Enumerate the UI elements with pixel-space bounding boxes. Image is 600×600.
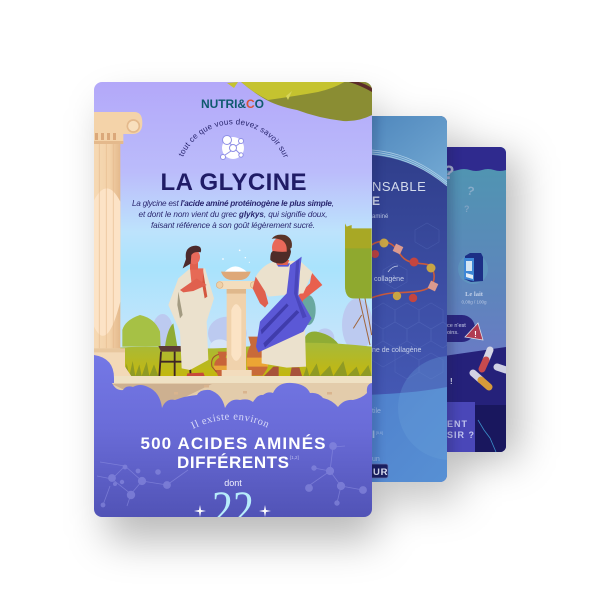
chain label: collagène	[374, 276, 404, 283]
intro paragraph: et dont le nom vient du grec glykys, qui signifie doux,	[138, 210, 328, 219]
scene: background, figures and props	[93, 112, 373, 377]
tree canopy top right	[227, 81, 372, 121]
intro arc text: Il existe environ	[190, 414, 268, 429]
intro paragraph	[132, 199, 334, 230]
icon: milk carton	[458, 253, 488, 284]
back card: milk page	[447, 147, 506, 452]
main title: LA GLYCINE	[160, 169, 306, 196]
headline 500 acides aminés: DIFFÉRENTS	[177, 453, 289, 472]
heading fragment: E	[372, 194, 380, 208]
dark curtain	[475, 405, 506, 452]
question marks: ?	[464, 204, 470, 214]
intro paragraph: La glycine est l'acide aminé protéinogène le plus simple,	[132, 199, 334, 208]
milk label: 0,08g / 100g	[461, 300, 487, 304]
question marks: ?	[466, 183, 476, 199]
man figure	[253, 235, 322, 377]
lower blue panel	[372, 387, 447, 482]
soft drop shadows	[106, 105, 518, 541]
stool	[158, 346, 192, 376]
jar right	[247, 337, 268, 376]
bushes	[122, 295, 340, 347]
headline 500 acides aminés: 500 ACIDES AMINÉS	[140, 434, 326, 453]
exclamation text: !	[450, 377, 453, 386]
collagen chain diagram	[365, 238, 438, 302]
question heading: SIR ?	[447, 430, 475, 440]
question marks: ?	[443, 163, 455, 184]
sparkles	[194, 505, 271, 517]
panel text fragments: [5,6]	[376, 431, 383, 435]
heading fragment	[372, 182, 426, 218]
left ionic column	[93, 112, 142, 377]
milk label: Le lait	[465, 291, 484, 298]
light blue header	[372, 116, 447, 186]
logo: NUTRI&CO	[201, 97, 264, 111]
woman figure	[168, 246, 214, 376]
headline 500 acides aminés	[140, 434, 326, 472]
dont: dont	[224, 478, 242, 488]
icon: capsules	[473, 350, 506, 387]
panel text fragments	[372, 408, 383, 463]
shadow of front card on middle card	[372, 116, 381, 482]
central pedestal and bowl	[216, 249, 257, 377]
molecule network decoration	[97, 442, 366, 507]
jar left	[212, 352, 233, 377]
intro paragraph: faisant référence à son goût légèrement sucré.	[151, 221, 315, 230]
molecule label: ne de collagène	[372, 347, 422, 354]
sky background	[94, 82, 372, 382]
lower dark section	[447, 347, 506, 452]
front card: la glycine	[94, 82, 372, 517]
header wave lines	[372, 150, 447, 186]
footnote: [1,2]	[290, 455, 299, 460]
panel text fragments: tile	[372, 408, 381, 415]
purple cloud base	[94, 355, 372, 517]
icon: glycine molecule	[220, 136, 244, 160]
question marks	[447, 166, 474, 212]
panel text fragments: I	[372, 429, 375, 441]
hexagon pattern	[372, 223, 447, 379]
icon: warning triangle	[465, 323, 483, 340]
heading fragment: aminé	[372, 214, 389, 220]
button: UR	[373, 467, 388, 478]
tree right	[345, 223, 372, 345]
question heading	[447, 420, 474, 438]
heading block	[447, 402, 475, 452]
button	[372, 464, 388, 478]
arc subtitle: tout ce que vous devez savoir sur	[178, 118, 288, 157]
distant hills	[154, 298, 372, 348]
top dark wave band	[447, 147, 506, 171]
question heading: ENT	[447, 419, 468, 429]
callout pill: oins.	[447, 330, 459, 336]
number 22: 22	[212, 482, 254, 535]
icon: warning triangle: !	[474, 330, 477, 339]
panel text fragments: un	[372, 456, 380, 463]
callout pill	[447, 315, 475, 342]
milk label	[461, 291, 487, 304]
middle card: collagen page	[372, 116, 447, 482]
grass ground	[120, 342, 372, 376]
panel circle highlight	[399, 356, 447, 402]
shadow of middle card on back card	[447, 147, 457, 452]
heading fragment: NSABLE	[372, 179, 426, 194]
callout pill: ce n'est	[447, 323, 466, 329]
infographic card stack	[84, 82, 540, 564]
stone floor	[94, 376, 372, 415]
